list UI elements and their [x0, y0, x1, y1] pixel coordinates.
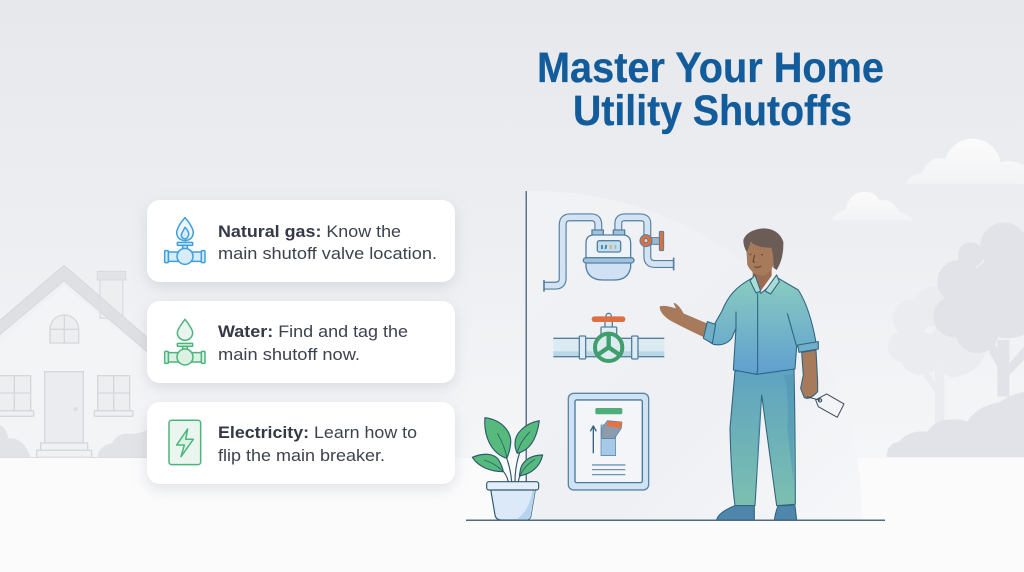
collar [750, 275, 779, 294]
text: natural gas [218, 222, 437, 263]
ground line [0, 456, 148, 459]
title: Utility Shutoffs [573, 87, 852, 135]
left arm and hand [660, 303, 707, 337]
floor line [466, 520, 885, 521]
meter dial digits [602, 245, 615, 249]
water valve [553, 313, 664, 361]
meter pipes [544, 217, 674, 292]
breaker face [575, 400, 642, 483]
shirt [705, 278, 816, 374]
house illustration [0, 265, 148, 458]
breaker panel [568, 393, 649, 490]
left window [0, 376, 34, 416]
label lines [592, 465, 625, 475]
stems [485, 433, 535, 482]
door [45, 372, 83, 443]
attic window [50, 315, 79, 343]
orange shutoff valve [640, 231, 664, 251]
hair [743, 228, 783, 270]
neck [753, 262, 772, 291]
text: electricity [218, 423, 417, 465]
small tree [888, 287, 986, 425]
leaves [472, 418, 543, 476]
right window [94, 376, 133, 416]
pot [487, 482, 539, 520]
text: electricity: Electricity: Learn how to [218, 423, 417, 442]
large tree [933, 223, 1024, 397]
right bushes [887, 392, 1024, 457]
text: water [218, 322, 408, 364]
title [537, 44, 884, 135]
panel: wall backdrop [527, 191, 862, 520]
steps [37, 443, 92, 457]
meter body [583, 230, 634, 280]
person [660, 228, 844, 520]
orange handle [592, 316, 625, 322]
green handwheel [595, 334, 622, 361]
chimney [97, 271, 126, 318]
left shrub [0, 423, 31, 457]
title: Master Your Home [537, 44, 884, 92]
breaker switch [601, 421, 622, 456]
left cuff [703, 322, 716, 343]
potted plant [472, 418, 543, 520]
text: natural gas: main shutoff valve location. [218, 244, 437, 263]
up arrow [590, 426, 596, 453]
panel: natural gas card [147, 200, 455, 282]
breaker frame [568, 393, 649, 490]
text: water: main shutoff now. [218, 345, 360, 364]
icon: water drop valve [165, 319, 205, 365]
text: natural gas: Natural gas: Know the [218, 222, 401, 241]
icon: gas flame valve [165, 218, 205, 264]
green indicator [595, 408, 622, 414]
valve stem [601, 313, 617, 335]
panel: electricity card [147, 402, 455, 484]
face [746, 241, 775, 275]
right shrub [97, 430, 147, 457]
water pipe [553, 338, 664, 357]
clouds and trees [832, 139, 1024, 457]
gas meter [544, 217, 674, 292]
icon: lightning panel [169, 420, 201, 465]
wall edge line [526, 191, 527, 520]
small cloud [832, 192, 914, 221]
large cloud [906, 139, 1024, 184]
pants shading [757, 374, 794, 482]
utility fixtures [544, 217, 674, 490]
panel: water card [147, 301, 455, 383]
house wall [0, 285, 143, 457]
leaf veins [484, 432, 535, 475]
shoes [717, 506, 797, 520]
text: water: Water: Find and tag the [218, 322, 408, 341]
pipe flanges [579, 336, 638, 359]
right arm [801, 350, 818, 398]
right cuff [798, 342, 818, 352]
roof [0, 265, 148, 353]
tag [807, 394, 844, 417]
ground band [0, 458, 1024, 572]
text: electricity: flip the main breaker. [218, 446, 385, 465]
face details [750, 254, 763, 267]
shirt seams [736, 293, 797, 374]
pants [730, 369, 795, 506]
